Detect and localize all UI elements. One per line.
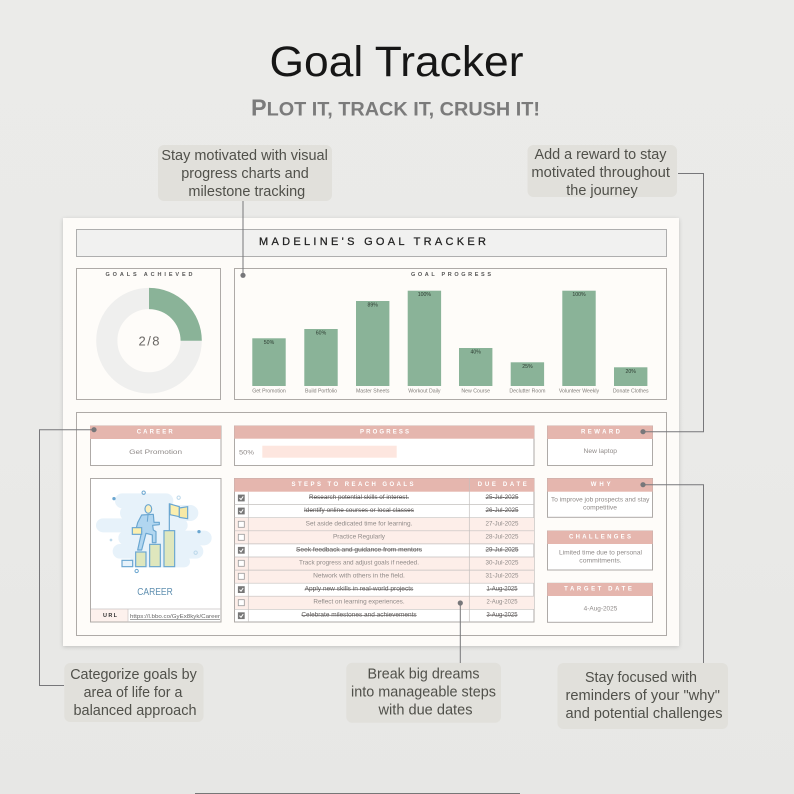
bar chart: Volunteer Weekly: [559, 388, 600, 394]
step 6: 30-Jul-2025: [486, 560, 519, 566]
reward card: REWARD: [581, 430, 621, 436]
panel: goal detail: [76, 412, 666, 636]
callout: reward: motivated throughout: [531, 165, 670, 181]
bar chart: Get Promotion: [252, 388, 286, 394]
step 6: [238, 560, 519, 566]
bar chart: Build Portfolio: [305, 388, 337, 394]
callout: categories: balanced approach: [74, 703, 196, 719]
url row: URL: [103, 613, 118, 619]
step 3: [238, 521, 519, 527]
panel: goals achieved: GOALS ACHIEVED: [106, 272, 193, 278]
step 5: [238, 547, 519, 553]
bar chart: 50%: [264, 340, 275, 346]
steps table: [234, 478, 534, 622]
step 2: Identify online courses or local classes: [304, 508, 414, 514]
bar chart: 89%: [368, 302, 378, 308]
bar chart: 40%: [471, 350, 481, 356]
step 1: Research potential skills of interest.: [309, 495, 409, 501]
donut chart: [107, 288, 202, 383]
step 4: 28-Jul-2025: [486, 534, 519, 540]
step 5: Seek feedback and guidance from mentors: [296, 547, 422, 553]
step 2: 26-Jul-2025: [486, 508, 519, 514]
step 10: [238, 613, 518, 619]
icon: climbing steps to a flag: [96, 491, 212, 573]
arrow: reward connector: [640, 174, 704, 434]
step 7: 31-Jul-2025: [486, 573, 519, 579]
arrow: categories connector: [40, 427, 97, 686]
step 1: 25-Jul-2025: [486, 495, 519, 501]
bar chart: Master Sheets: [356, 388, 390, 394]
career category card: Get Promotion: [129, 449, 183, 456]
bar chart: [252, 291, 649, 394]
donut chart: 2/8: [138, 334, 160, 348]
target date card: TARGET DATE: [564, 586, 632, 592]
bar chart: Declutter Room: [509, 388, 545, 394]
why card: WHY: [591, 482, 611, 488]
challenges card: Limited time due to personal: [559, 550, 642, 556]
step 9: 2-Aug-2025: [486, 600, 518, 606]
bar chart: 20%: [626, 369, 636, 375]
step 8: Apply new skills in real-world projects: [305, 587, 413, 593]
callout: steps: Break big dreams: [368, 666, 480, 682]
step 1: [238, 495, 519, 501]
callout: categories: Categorize goals by: [70, 667, 198, 683]
bottom edge strip: [195, 793, 520, 794]
title: Goal Tracker: [270, 38, 524, 86]
callout: reward: [528, 145, 677, 199]
callout: reward: the journey: [566, 183, 638, 199]
panel: goal progress: GOAL PROGRESS: [411, 272, 491, 278]
step 7: [238, 573, 519, 579]
progress bar: [262, 446, 397, 458]
progress card: PROGRESS: [360, 430, 409, 436]
sheet title bar: [76, 230, 666, 256]
callout: visual progress: [158, 145, 332, 201]
challenges card: CHALLENGES: [569, 534, 631, 540]
panel: goals achieved: [76, 268, 220, 400]
step 8: 1-Aug-2025: [486, 587, 518, 593]
progress card: 50%: [239, 450, 254, 456]
why card: To improve job prospects and stay: [551, 498, 649, 504]
callout: steps: with due dates: [377, 702, 472, 718]
reward card: New laptop: [584, 449, 618, 455]
arrow: visual progress connector: [240, 201, 246, 278]
step 6: Track progress and adjust goals if needed.: [299, 560, 419, 566]
callout: steps: into manageable steps: [351, 685, 496, 701]
callout: visual progress: Stay motivated with visual: [161, 148, 328, 164]
callout: why and challenges: and potential challenges: [566, 706, 722, 722]
step 7: Network with others in the field.: [313, 573, 405, 579]
step 9: [238, 600, 518, 606]
sheet title bar: MADELINE'S GOAL TRACKER: [259, 236, 486, 248]
callout: categories: area of life for a: [84, 685, 183, 701]
target date card: [547, 583, 653, 622]
bar chart: 25%: [522, 364, 533, 370]
steps table: STEPS TO REACH GOALS: [292, 482, 414, 488]
step 9: Reflect on learning experiences.: [313, 600, 405, 606]
callout: categories: [64, 663, 204, 722]
career category card: CAREER: [137, 430, 173, 436]
subtitle: PLOT IT, TRACK IT, CRUSH IT!: [251, 95, 540, 121]
reward card: [547, 426, 653, 466]
callout: why and challenges: [558, 663, 728, 729]
step 2: [238, 508, 519, 514]
step 4: Practice Regularly: [333, 534, 385, 540]
callout: why and challenges: reminders of your "why": [566, 688, 720, 704]
bar chart: New Course: [461, 388, 490, 394]
bar chart: 60%: [316, 330, 327, 336]
steps table: DUE DATE: [478, 482, 527, 488]
bar chart: 100%: [418, 292, 431, 298]
callout: visual progress: progress charts and: [181, 166, 309, 182]
career illustration card: [90, 478, 221, 622]
callout: why and challenges: Stay focused with: [585, 670, 697, 686]
bar chart: Workout Daily: [408, 388, 441, 394]
target date card: 4-Aug-2025: [584, 606, 618, 612]
career category card: [90, 426, 221, 466]
step 3: 27-Jul-2025: [486, 521, 519, 527]
bar chart: Donate Clothes: [613, 388, 649, 394]
progress card: [234, 426, 534, 466]
bar chart: 100%: [572, 292, 586, 298]
callout: reward: Add a reward to stay: [534, 147, 667, 163]
callout: visual progress: milestone tracking: [188, 184, 305, 200]
step 8: [238, 587, 518, 593]
arrow: steps connector: [458, 600, 463, 663]
panel: goal progress: [234, 268, 666, 400]
url row: [91, 609, 221, 622]
challenges card: commitments.: [579, 558, 622, 564]
tracker sheet: [63, 218, 679, 646]
url row: https://l.bbo.co/GyEx8kyk/Career: [130, 614, 220, 620]
callout: steps: [346, 663, 501, 723]
step 4: [238, 534, 519, 540]
career illustration card: CAREER: [137, 587, 173, 598]
why card: [547, 478, 653, 517]
step 10: Celebrate milestones and achievements: [301, 613, 417, 619]
step 5: 29-Jul-2025: [486, 547, 519, 553]
step 3: Set aside dedicated time for learning.: [306, 521, 413, 527]
arrow: why connector: [640, 482, 704, 663]
why card: competitive: [583, 506, 618, 512]
challenges card: [547, 531, 653, 570]
step 10: 3-Aug-2025: [486, 613, 518, 619]
